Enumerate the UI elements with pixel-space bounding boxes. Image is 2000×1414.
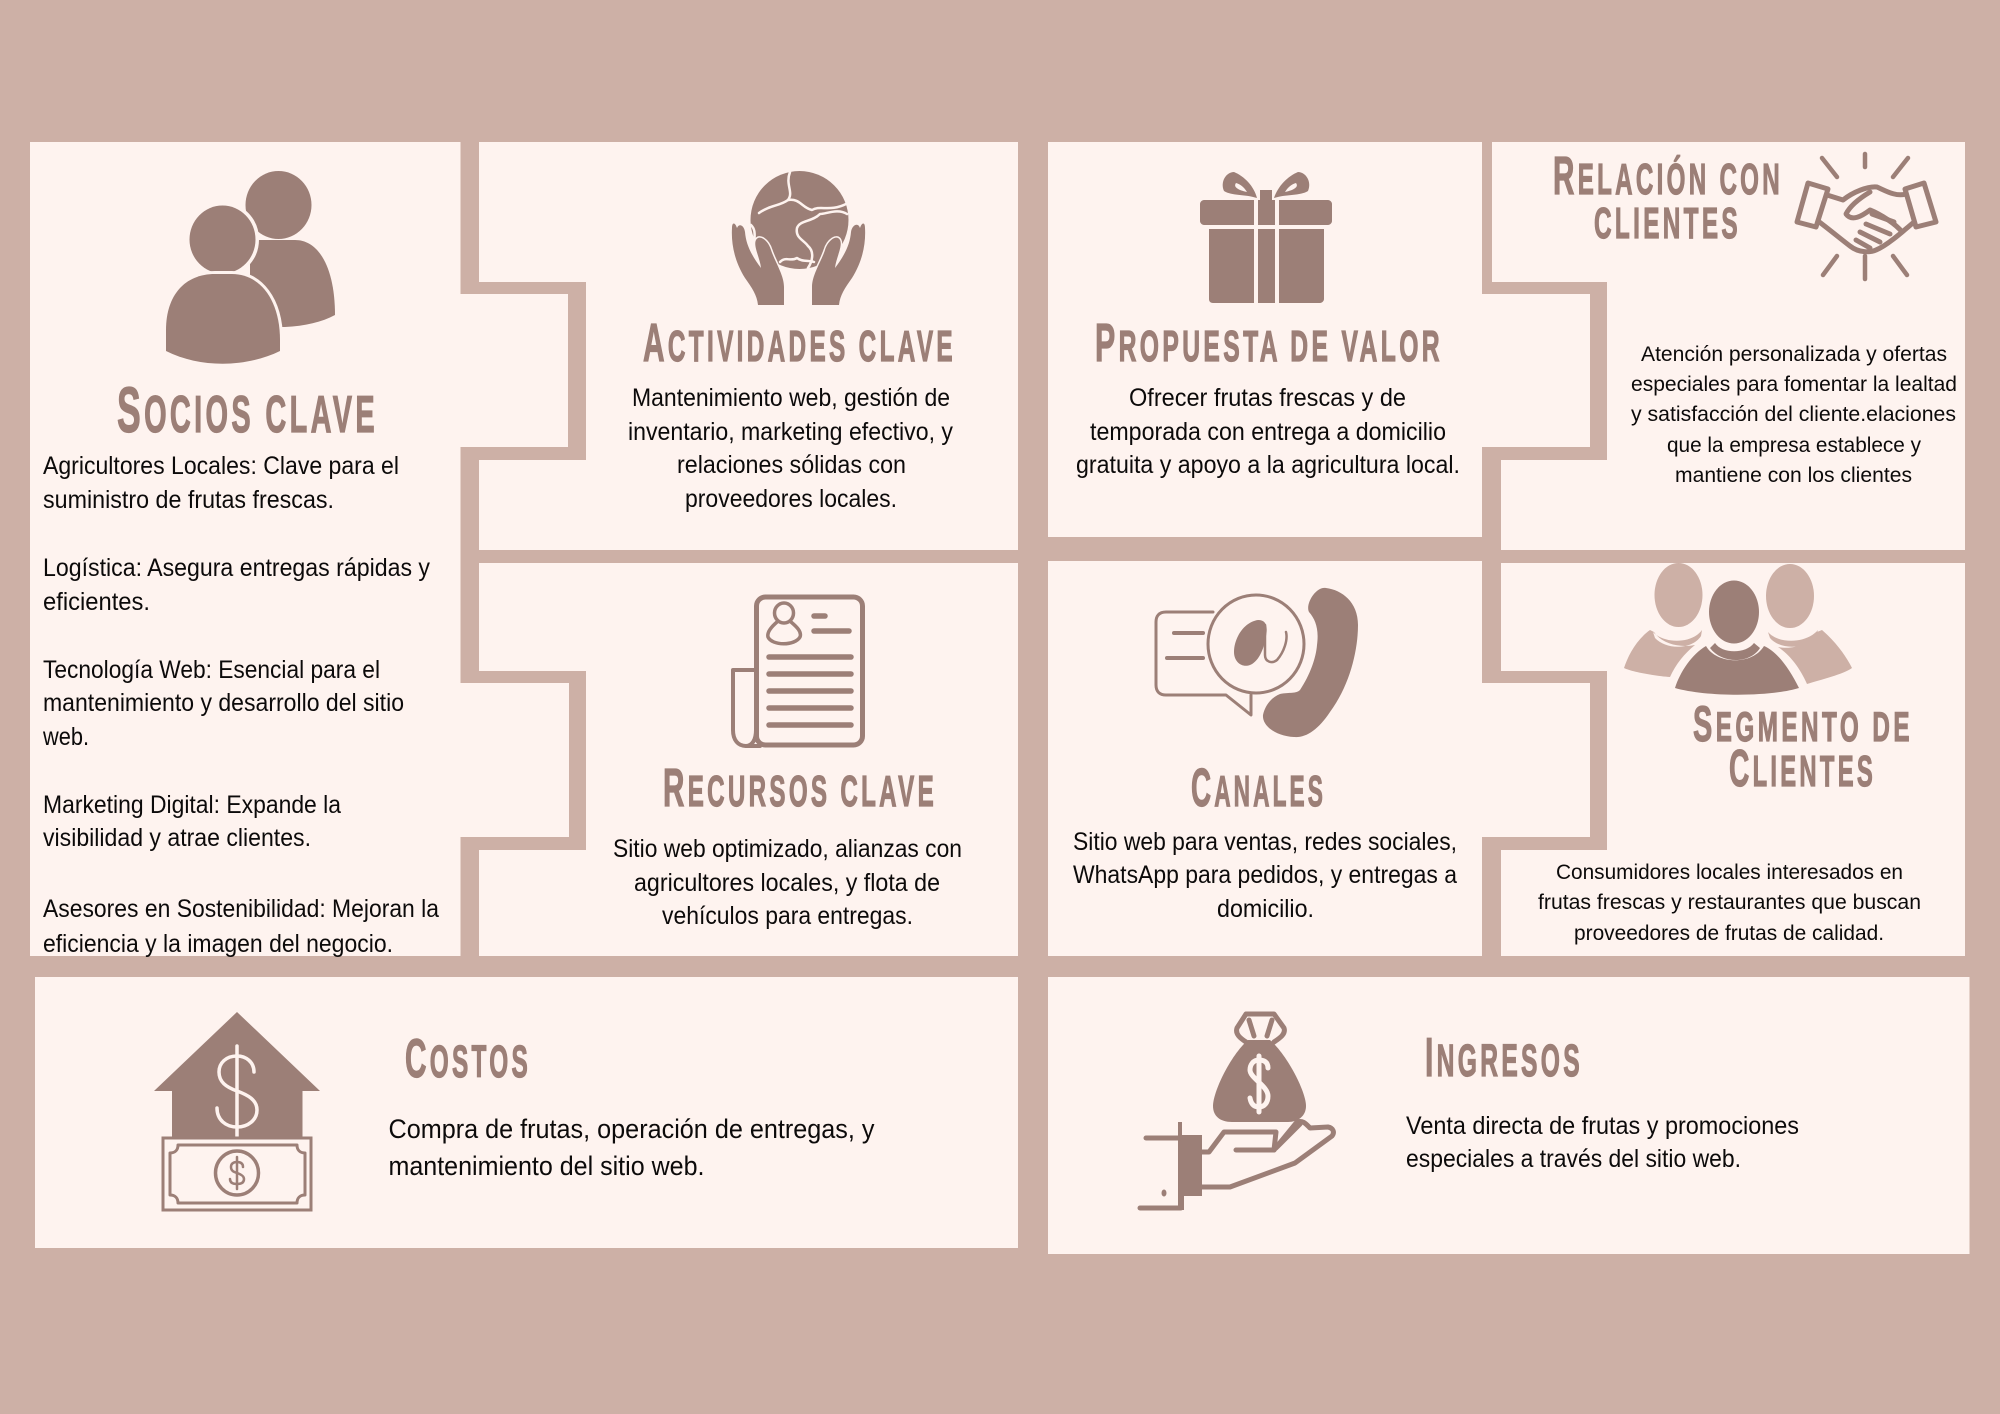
text: propuesta de valor: temporada con entrega a domicilio [1090, 418, 1446, 446]
panel: relación con clientes [1492, 142, 1965, 550]
text: socios clave list: mantenimiento y desarrollo del sitio [43, 689, 404, 717]
text: socios clave list: web. [42, 723, 89, 751]
panel: socios clave [30, 142, 569, 958]
text: recursos clave: vehículos para entregas. [662, 902, 913, 930]
text: recursos clave: agricultores locales, y flota de [634, 869, 940, 897]
icon: document with profile [733, 597, 862, 746]
heading: canales: CANALES [1191, 758, 1326, 818]
text: costos: Compra de frutas, operación de entregas, y [388, 1114, 875, 1144]
panel: recursos clave [479, 563, 1018, 956]
heading: relación con clientes: CLIENTES [1594, 199, 1741, 248]
text: relación con clientes: Atención personalizada y ofertas [1641, 342, 1947, 366]
text: actividades clave: inventario, marketing efectivo, y [628, 418, 953, 446]
panel: actividades clave [479, 142, 1018, 550]
panel: costos [35, 977, 1018, 1248]
text: segmento de clientes: frutas frescas y restaurantes que buscan [1538, 890, 1921, 914]
text: canales [1073, 828, 1457, 923]
text: relación con clientes: especiales para fomentar la lealtad [1631, 372, 1957, 396]
panel: segmento de clientes [1501, 563, 1965, 956]
panel: ingresos [1048, 977, 1970, 1254]
panel: propuesta de valor [1048, 142, 1590, 537]
text: ingresos [1406, 1112, 1799, 1173]
icon: house with dollar bill [154, 1012, 320, 1210]
text: segmento de clientes [1538, 860, 1921, 945]
heading: socios clave: SOCIOS CLAVE [117, 374, 378, 446]
text: actividades clave: proveedores locales. [685, 485, 897, 513]
text: socios clave list: visibilidad y atrae clientes. [43, 824, 311, 852]
heading: ingresos: INGRESOS [1425, 1026, 1583, 1088]
text: socios clave list: Marketing Digital: Expande la [43, 791, 341, 819]
text: relación con clientes [1631, 342, 1957, 487]
text: canales: WhatsApp para pedidos, y entregas a [1073, 861, 1457, 889]
icon: gift box [1200, 172, 1332, 303]
text: socios clave list: eficiencia y la imagen del negocio. [43, 930, 393, 958]
heading: segmento de clientes: CLIENTES [1729, 740, 1876, 798]
heading: costos: COSTOS [405, 1027, 531, 1089]
heading: actividades clave: ACTIVIDADES CLAVE [643, 313, 956, 373]
text: socios clave list: Asesores en Sostenibilidad: Mejoran la [43, 895, 439, 923]
icon: group of three people [1624, 563, 1852, 695]
icon: hands holding globe [732, 171, 865, 305]
text: canales: Sitio web para ventas, redes sociales, [1073, 828, 1457, 856]
text: socios clave list: Logística: Asegura entregas rápidas y [43, 554, 430, 582]
text: ingresos: Venta directa de frutas y promociones [1406, 1112, 1799, 1140]
text: propuesta de valor: gratuita y apoyo a la agricultura local. [1076, 451, 1460, 479]
text: socios clave list: Tecnología Web: Esencial para el [43, 656, 380, 684]
text: costos: mantenimiento del sitio web. [388, 1151, 704, 1181]
text: segmento de clientes: Consumidores locales interesados en [1556, 860, 1903, 884]
heading: segmento de clientes [1693, 696, 1913, 798]
text: ingresos: especiales a través del sitio web. [1406, 1145, 1741, 1173]
icon: handshake [1797, 154, 1936, 279]
text: segmento de clientes: proveedores de frutas de calidad. [1574, 921, 1884, 945]
icon: chat bubble, at sign and phone [1156, 588, 1358, 737]
text: propuesta de valor: Ofrecer frutas frescas y de [1129, 384, 1406, 412]
text: actividades clave: Mantenimiento web, gestión de [632, 384, 950, 412]
heading: relación con clientes [1553, 146, 1783, 248]
heading: propuesta de valor: PROPUESTA DE VALOR [1095, 313, 1443, 373]
text: actividades clave: relaciones sólidas con [677, 451, 906, 479]
text: relación con clientes: que la empresa establece y [1667, 433, 1921, 457]
text: actividades clave [628, 384, 953, 513]
heading: recursos clave: RECURSOS CLAVE [663, 758, 937, 818]
heading: relación con clientes: RELACIÓN CON [1553, 146, 1783, 206]
text: relación con clientes: y satisfacción del cliente.elaciones [1631, 402, 1956, 426]
text: propuesta de valor [1076, 384, 1460, 479]
text: canales: domicilio. [1217, 895, 1314, 923]
text: costos [388, 1114, 875, 1181]
text: socios clave list: suministro de frutas frescas. [43, 486, 334, 514]
text: recursos clave [613, 835, 962, 930]
icon: two people [166, 171, 335, 364]
panel: canales [1048, 561, 1590, 956]
text: recursos clave: Sitio web optimizado, alianzas con [613, 835, 962, 863]
icon: hand holding money bag [1140, 1014, 1333, 1210]
text: socios clave list [42, 452, 439, 958]
text: socios clave list: Agricultores Locales: Clave para el [43, 452, 399, 480]
text: socios clave list: eficientes. [43, 588, 150, 616]
text: relación con clientes: mantiene con los clientes [1675, 463, 1912, 487]
